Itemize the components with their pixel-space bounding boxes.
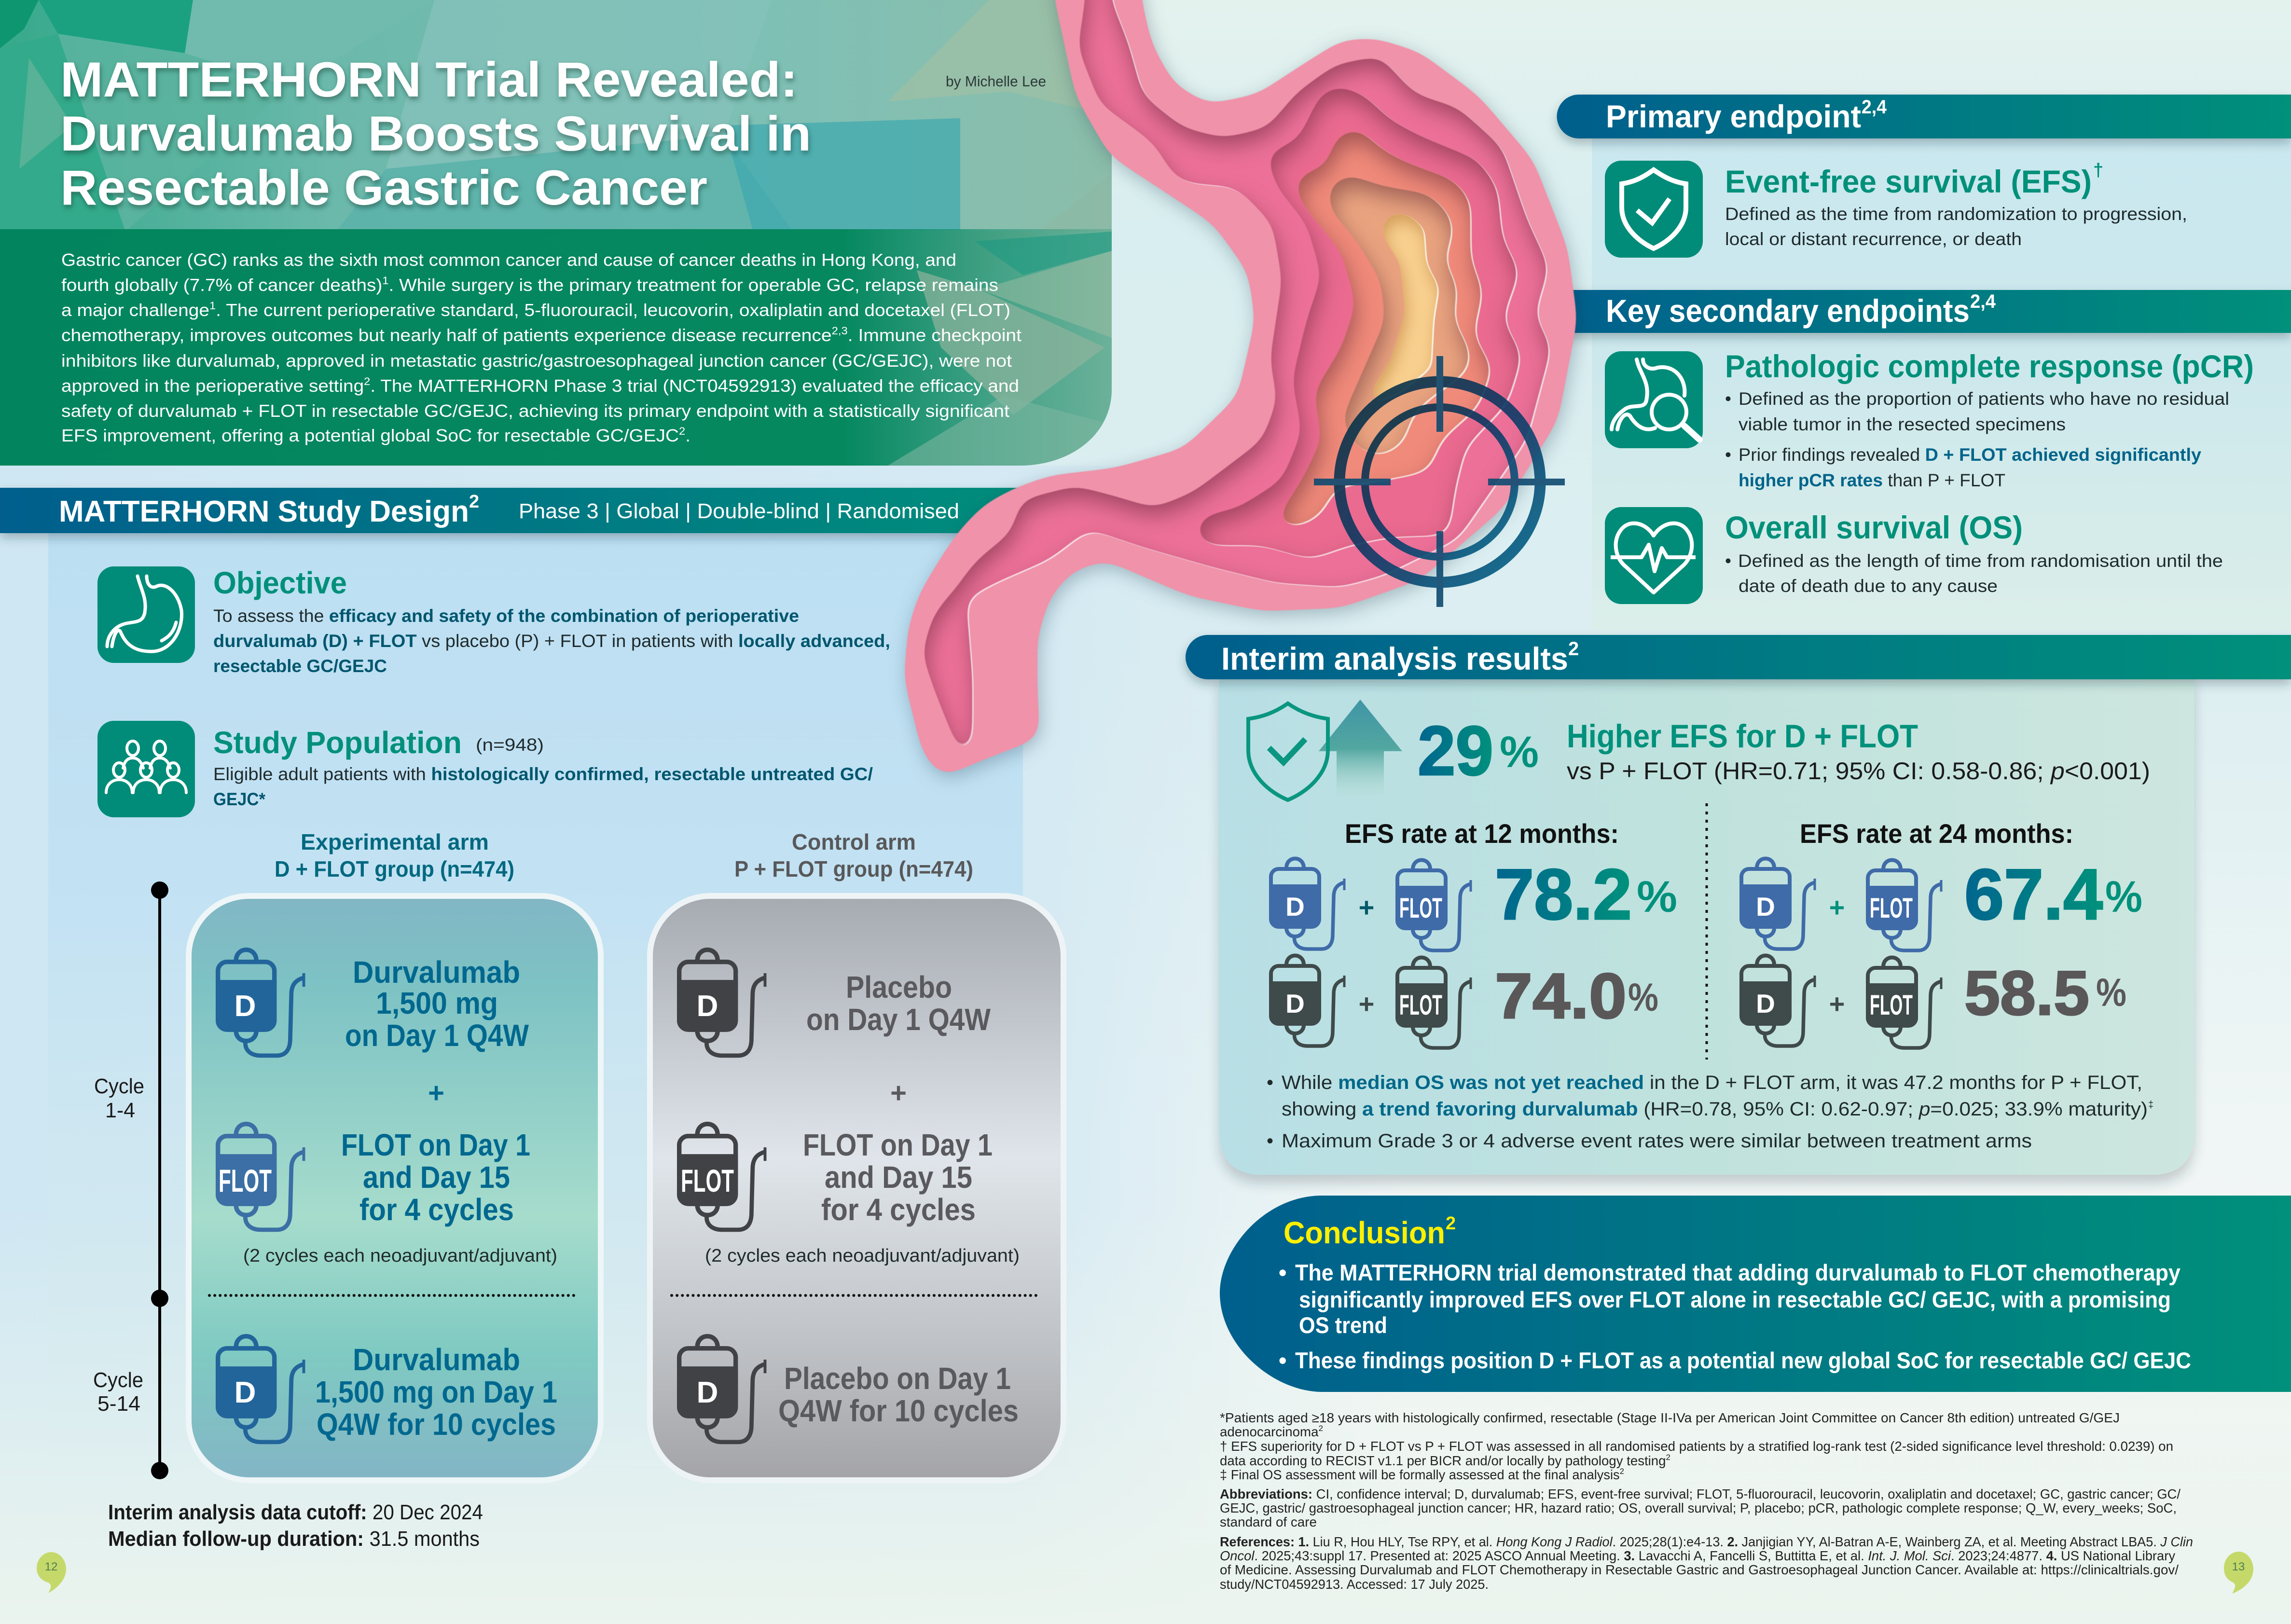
footnotes: † EFS superiority for D + FLOT vs P + FLOT was assessed in all randomised patients by a stratified log-rank test (2-sided significance level threshold: 0.0239) on bbox=[1220, 1439, 2173, 1454]
icon: D plus FLOT bags bbox=[1739, 859, 1941, 950]
icon: D plus FLOT bags bbox=[1269, 859, 1471, 950]
stat 74.0: % bbox=[1628, 976, 1658, 1019]
heading 12 months: EFS rate at 12 months: bbox=[1345, 818, 1619, 849]
arm heading: experimental: D + FLOT group (n=474) bbox=[275, 856, 514, 881]
objective text bbox=[213, 606, 890, 676]
icon: durvalumab bag bbox=[216, 950, 304, 1056]
cycle label 5-14 bbox=[93, 1368, 143, 1416]
references: Oncol. 2025;43:suppl 17. Presented at: 2025 ASCO Annual Meeting. 3. Lavacchi A, Fancelli S, Buttitta E, et al. Int. J. Mol. Sci. 2023;24:4877. 4. US National Library bbox=[1220, 1548, 2175, 1563]
intro text block: . Immune checkpoint bbox=[848, 325, 1021, 345]
banner: study design: MATTERHORN Study Design bbox=[59, 495, 469, 528]
results bullets bbox=[1267, 1072, 2153, 1152]
arm heading: experimental bbox=[275, 829, 514, 881]
stat 78.2: 78.2 bbox=[1495, 854, 1632, 935]
icon: durvalumab bag: D bbox=[235, 990, 256, 1023]
banner: study design bbox=[0, 488, 1076, 533]
footnotes bbox=[1220, 1410, 2173, 1482]
results bullets: • bbox=[1267, 1072, 1273, 1093]
footnotes: data according to RECIST v1.1 per BICR and/or locally by pathology testing bbox=[1220, 1453, 1664, 1468]
banner: key secondary endpoints bbox=[1544, 290, 2291, 333]
abbreviations: GEJC, gastric/ gastroesophageal junction cancer; HR, hazard ratio; OS, overall survival; P, placebo; pCR, pathologic complete response; Q_W, every_weeks; SoC, bbox=[1220, 1500, 2177, 1515]
conclusion bullets: • bbox=[1279, 1260, 1286, 1285]
page number 13: 13 bbox=[2232, 1560, 2245, 1573]
intro text block: EFS improvement, offering a potential global SoC for resectable GC/GEJC bbox=[61, 426, 635, 445]
arm heading: experimental: Experimental arm bbox=[301, 829, 489, 854]
heading: pCR: Pathologic complete response (pCR) bbox=[1725, 348, 2254, 384]
footnotes: 2 bbox=[1620, 1467, 1624, 1476]
stat label: Higher EFS for D + FLOT bbox=[1567, 718, 1918, 755]
icon: D plus FLOT bags: + bbox=[1359, 892, 1374, 922]
OS bullet: Defined as the length of time from randomisation until the bbox=[1738, 551, 2223, 571]
footnotes: 2 bbox=[1666, 1453, 1670, 1462]
arm heading: control: P + FLOT group (n=474) bbox=[734, 856, 973, 881]
title: Resectable Gastric Cancer bbox=[60, 160, 707, 215]
objective text: resectable GC/GEJC bbox=[213, 656, 387, 676]
section: objective bbox=[97, 565, 890, 676]
intro text block: . The current perioperative standard, 5-fluorouracil, leucovorin, oxaliplatin and docetaxel (FLOT) bbox=[216, 300, 1010, 320]
intro text block bbox=[61, 250, 1021, 445]
footnotes: *Patients aged ≥18 years with histologically confirmed, resectable (Stage II-IVa per American Joint Committee on Cancer 8th edition) untreated G/GEJ bbox=[1220, 1410, 2120, 1425]
icon: D plus FLOT bags: FLOT bbox=[1399, 893, 1442, 924]
icon: placebo plus FLOT bags: FLOT bbox=[1870, 990, 1913, 1021]
panel: title header bbox=[0, 0, 1112, 466]
pCR bullets: higher pCR rates than P + FLOT bbox=[1739, 470, 2005, 490]
results bullets: ‡ bbox=[2148, 1100, 2153, 1110]
icon: placebo bag: D bbox=[697, 990, 718, 1023]
placebo dose: on Day 1 Q4W bbox=[806, 1002, 991, 1037]
cycle label 5-14: 5-14 bbox=[97, 1392, 140, 1416]
banner: interim analysis results bbox=[1186, 635, 2291, 679]
icon: placebo plus FLOT bags: D bbox=[1285, 989, 1305, 1018]
intro text block: 2,3 bbox=[832, 325, 848, 337]
conclusion heading: Conclusion bbox=[1284, 1215, 1445, 1250]
stat 74.0: 74.0 bbox=[1495, 961, 1627, 1032]
pCR bullets: • bbox=[1725, 389, 1731, 409]
FLOT schedule: FLOT on Day 1 bbox=[803, 1128, 993, 1162]
durvalumab dose: 1,500 mg bbox=[376, 986, 498, 1020]
stat 58.5: 58.5 bbox=[1964, 958, 2089, 1028]
page number 13 bbox=[2224, 1552, 2253, 1594]
FLOT schedule bbox=[341, 1128, 530, 1227]
panel: control arm bbox=[650, 896, 1063, 1480]
FLOT schedule: and Day 15 bbox=[825, 1160, 972, 1195]
icon: people bbox=[97, 721, 195, 817]
banner: primary endpoint: Primary endpoint bbox=[1606, 98, 1861, 134]
durvalumab dose: Durvalumab bbox=[353, 955, 520, 990]
cycle label 1-4: Cycle bbox=[94, 1074, 144, 1098]
icon: placebo plus FLOT bags bbox=[1739, 955, 1941, 1048]
intro text block: 1 bbox=[209, 300, 216, 312]
icon: placebo plus FLOT bags bbox=[1269, 955, 1471, 1048]
references: of Medicine. Assessing Durvalumab and FLOT Chemotherapy in Resectable Gastric and Gastroesophageal Junction Cancer. Available at: https://clinicaltrials.gov/ bbox=[1220, 1562, 2179, 1577]
heading 24 months: EFS rate at 24 months: bbox=[1800, 818, 2073, 849]
icon: durvalumab bag bbox=[216, 1336, 304, 1442]
panel: endpoints background bbox=[1592, 138, 2291, 631]
OS bullet: • bbox=[1725, 551, 1731, 571]
intro text block: 1 bbox=[382, 275, 389, 287]
icon: placebo plus FLOT bags: + bbox=[1359, 989, 1374, 1019]
placebo maintenance bbox=[778, 1361, 1019, 1428]
stat 58.5: % bbox=[2096, 971, 2126, 1015]
pCR bullets: Defined as the proportion of patients who have no residual bbox=[1739, 389, 2229, 409]
heading: EFS: Event-free survival (EFS) bbox=[1725, 164, 2092, 199]
sample size: (n=948) bbox=[476, 735, 544, 755]
population text bbox=[213, 764, 873, 809]
intro text block: a major challenge bbox=[61, 300, 198, 320]
EFS definition bbox=[1725, 204, 2187, 249]
OS bullet: date of death due to any cause bbox=[1739, 576, 1998, 596]
icon: target crosshair bbox=[1314, 356, 1565, 607]
heading: objective: Objective bbox=[213, 565, 347, 600]
stat 67.4: 67.4 bbox=[1964, 854, 2103, 935]
durvalumab maintenance: Q4W for 10 cycles bbox=[317, 1407, 556, 1442]
icon: FLOT bag: FLOT bbox=[219, 1163, 272, 1198]
stat: 29 percent: % bbox=[1500, 728, 1539, 777]
stat: 29 percent: 29 bbox=[1418, 712, 1493, 790]
banner: interim analysis results: 2 bbox=[1568, 638, 1579, 660]
icon: heart pulse bbox=[1605, 507, 1703, 604]
EFS definition: Defined as the time from randomization to progression, bbox=[1725, 204, 2187, 224]
intro text block: Gastric cancer (GC) ranks as the sixth most common cancer and cause of cancer deaths in Hong Kong, and bbox=[61, 250, 956, 270]
panel: interim results background bbox=[1219, 675, 2194, 1175]
results bullets: Maximum Grade 3 or 4 adverse event rates were similar between treatment arms bbox=[1282, 1130, 2032, 1152]
panel: experimental arm bbox=[189, 896, 601, 1480]
conclusion bullets bbox=[1279, 1260, 2191, 1373]
title bbox=[60, 52, 811, 215]
banner: study design: Phase 3 | Global | Double-blind | Randomised bbox=[519, 499, 959, 523]
stat 67.4: % bbox=[2105, 872, 2142, 922]
stat label: vs P + FLOT (HR=0.71; 95% CI: 0.58-0.86; p<0.001) bbox=[1567, 757, 2150, 784]
conclusion bullets: These findings position D + FLOT as a potential new global SoC for resectable GC/ GEJC bbox=[1295, 1348, 2191, 1373]
banner: interim analysis results: Interim analysis results bbox=[1221, 641, 1568, 676]
byline: by Michelle Lee bbox=[946, 73, 1046, 90]
placebo maintenance: Placebo on Day 1 bbox=[784, 1361, 1011, 1396]
durvalumab maintenance: Durvalumab bbox=[353, 1342, 520, 1377]
conclusion bullets: • bbox=[1279, 1348, 1286, 1373]
EFS definition: local or distant recurrence, or death bbox=[1725, 229, 2022, 249]
results bullets: showing a trend favoring durvalumab (HR=0.78, 95% CI: 0.62-0.97; p=0.025; 33.9% maturity) bbox=[1282, 1099, 2148, 1120]
icon: D plus FLOT bags: D bbox=[1285, 892, 1305, 922]
panel: study design background bbox=[48, 533, 1023, 1498]
EFS rate at 12 months bbox=[1269, 818, 1677, 1048]
intro text block: approved in the perioperative setting bbox=[61, 376, 342, 396]
icon: placebo bag bbox=[677, 1336, 765, 1442]
results bullets: • bbox=[1267, 1130, 1273, 1152]
durvalumab maintenance bbox=[315, 1342, 557, 1442]
placebo maintenance: Q4W for 10 cycles bbox=[778, 1393, 1019, 1428]
pCR bullets: viable tumor in the resected specimens bbox=[1739, 414, 2066, 434]
objective text: durvalumab (D) + FLOT vs placebo (P) + FLOT in patients with locally advanced, bbox=[213, 631, 890, 651]
FLOT schedule: and Day 15 bbox=[363, 1160, 510, 1195]
cycle note: (2 cycles each neoadjuvant/adjuvant) bbox=[705, 1246, 1020, 1266]
icon: placebo bag: D bbox=[697, 1376, 718, 1409]
illustration: layered paper stomach bbox=[904, 0, 1577, 778]
cycle note: (2 cycles each neoadjuvant/adjuvant) bbox=[243, 1246, 557, 1266]
abbreviations: Abbreviations: CI, confidence interval; D, durvalumab; EFS, event-free survival; FLOT, 5-fluorouracil, leucovorin, oxaliplatin and docetaxel; GC, gastric cancer; GC/ bbox=[1220, 1486, 2181, 1501]
references bbox=[1220, 1534, 2193, 1592]
intro text block: . bbox=[685, 426, 690, 445]
placebo dose bbox=[806, 970, 991, 1037]
icon: FLOT bag: FLOT bbox=[681, 1163, 734, 1198]
intro text block: . While surgery is the primary treatment for operable GC, relapse remains bbox=[389, 275, 998, 295]
arm heading: control: Control arm bbox=[792, 829, 916, 854]
conclusion bullets: The MATTERHORN trial demonstrated that adding durvalumab to FLOT chemotherapy bbox=[1295, 1260, 2181, 1285]
placebo dose: Placebo bbox=[846, 970, 952, 1005]
pCR bullets bbox=[1725, 389, 2229, 490]
intro text block: safety of durvalumab + FLOT in resectable GC/GEJC, achieving its primary endpoint with a statistically significant bbox=[61, 401, 1009, 421]
card: overall survival bbox=[1605, 507, 2223, 604]
durvalumab maintenance: 1,500 mg on Day 1 bbox=[315, 1375, 557, 1409]
cycle label 1-4 bbox=[94, 1074, 144, 1122]
FLOT schedule bbox=[803, 1128, 993, 1227]
FLOT schedule: FLOT on Day 1 bbox=[341, 1128, 530, 1162]
heading: study population: Study Population bbox=[213, 725, 462, 760]
banner: key secondary endpoints: 2,4 bbox=[1970, 291, 1996, 312]
OS bullet bbox=[1725, 551, 2223, 596]
study dates: Interim analysis data cutoff: 20 Dec 2024 bbox=[108, 1500, 483, 1524]
abbreviations: standard of care bbox=[1220, 1514, 1317, 1529]
footnotes: adenocarcinoma bbox=[1220, 1424, 1318, 1439]
timeline bbox=[93, 881, 168, 1479]
results bullets: While median OS was not yet reached in the D + FLOT arm, it was 47.2 months for P + FLOT, bbox=[1282, 1072, 2142, 1093]
icon: FLOT bag bbox=[216, 1124, 304, 1230]
panel: conclusion bbox=[1220, 1196, 2291, 1392]
icon: shield with rising arrow bbox=[1248, 700, 1402, 800]
icon: FLOT bag bbox=[677, 1124, 765, 1230]
study dates bbox=[108, 1500, 483, 1551]
objective text: To assess the efficacy and safety of the combination of perioperative bbox=[213, 606, 799, 626]
footnotes: 2 bbox=[1318, 1424, 1323, 1433]
pCR bullets: • bbox=[1725, 445, 1731, 465]
EFS rate at 24 months bbox=[1739, 818, 2142, 1048]
icon: shield bbox=[1605, 161, 1703, 258]
references: References: 1. Liu R, Hou HLY, Tse RPY, et al. Hong Kong J Radiol. 2025;28(1):e4-13. 2. Janjigian YY, Al-Batran A-E, Wainberg ZA, et al. Meeting Abstract LBA5. J Clin bbox=[1220, 1534, 2193, 1549]
conclusion bullets: significantly improved EFS over FLOT alone in resectable GC/ GEJC, with a promising bbox=[1299, 1287, 2171, 1312]
durvalumab dose bbox=[345, 955, 529, 1053]
banner: study design: 2 bbox=[469, 492, 479, 512]
card: event-free survival: † bbox=[2093, 160, 2103, 180]
pCR bullets: Prior findings revealed D + FLOT achieved significantly bbox=[1739, 445, 2201, 465]
banner: primary endpoint: 2,4 bbox=[1862, 96, 1887, 118]
section: study population bbox=[97, 721, 873, 817]
heading: OS: Overall survival (OS) bbox=[1725, 509, 2023, 545]
intro text block: fourth globally (7.7% of cancer deaths) bbox=[61, 275, 359, 295]
intro text block: . The MATTERHORN Phase 3 trial (NCT04592913) evaluated the efficacy and bbox=[370, 376, 1019, 396]
icon: D plus FLOT bags: D bbox=[1756, 892, 1775, 922]
study dates: Median follow-up duration: 31.5 months bbox=[108, 1527, 480, 1551]
cycle label 1-4: 1-4 bbox=[105, 1099, 135, 1122]
arm heading: control bbox=[734, 829, 973, 881]
FLOT schedule: for 4 cycles bbox=[359, 1192, 514, 1227]
plus: + bbox=[428, 1077, 444, 1109]
icon: durvalumab bag: D bbox=[235, 1376, 256, 1409]
banner: key secondary endpoints: Key secondary endpoints bbox=[1606, 293, 1970, 329]
conclusion bullets: OS trend bbox=[1299, 1312, 1387, 1338]
intro text block: chemotherapy, improves outcomes but nearly half of patients experience disease recurrence bbox=[61, 325, 772, 345]
icon: stomach bbox=[97, 566, 195, 663]
abbreviations bbox=[1220, 1486, 2181, 1529]
banner: primary endpoint bbox=[1557, 95, 2291, 138]
page number 12 bbox=[37, 1552, 66, 1593]
title: MATTERHORN Trial Revealed: bbox=[60, 52, 798, 107]
durvalumab dose: on Day 1 Q4W bbox=[345, 1018, 529, 1053]
intro text block: inhibitors like durvalumab, approved in metastatic gastric/gastroesophageal junction cancer (GC/GEJC), were not bbox=[61, 351, 1012, 371]
references: study/NCT04592913. Accessed: 17 July 2025. bbox=[1220, 1577, 1489, 1592]
plus: + bbox=[890, 1077, 907, 1109]
population text: Eligible adult patients with histologically confirmed, resectable untreated GC/ bbox=[213, 764, 873, 784]
footnotes: ‡ Final OS assessment will be formally assessed at the final analysis bbox=[1220, 1467, 1624, 1482]
intro text block: 2 bbox=[364, 375, 370, 387]
conclusion heading: 2 bbox=[1446, 1213, 1456, 1234]
stat: 29 percent bbox=[1418, 712, 1539, 790]
icon: placebo plus FLOT bags: D bbox=[1756, 989, 1775, 1018]
stat label bbox=[1567, 718, 2150, 784]
icon: stomach magnifier bbox=[1605, 351, 1703, 448]
page number 12: 12 bbox=[45, 1560, 57, 1573]
stat 78.2: % bbox=[1637, 872, 1677, 922]
card: event-free survival bbox=[1605, 160, 2187, 258]
icon: placebo bag bbox=[677, 950, 765, 1056]
icon: placebo plus FLOT bags: FLOT bbox=[1399, 990, 1442, 1021]
FLOT schedule: for 4 cycles bbox=[821, 1192, 976, 1227]
population text: GEJC* bbox=[213, 789, 266, 809]
intro text block: 2 bbox=[679, 425, 685, 437]
icon: placebo plus FLOT bags: + bbox=[1829, 989, 1845, 1019]
icon: D plus FLOT bags: + bbox=[1829, 892, 1845, 922]
cycle label 5-14: Cycle bbox=[93, 1368, 143, 1392]
card: pathologic complete response bbox=[1605, 348, 2254, 490]
icon: D plus FLOT bags: FLOT bbox=[1870, 893, 1913, 924]
title: Durvalumab Boosts Survival in bbox=[60, 106, 811, 161]
